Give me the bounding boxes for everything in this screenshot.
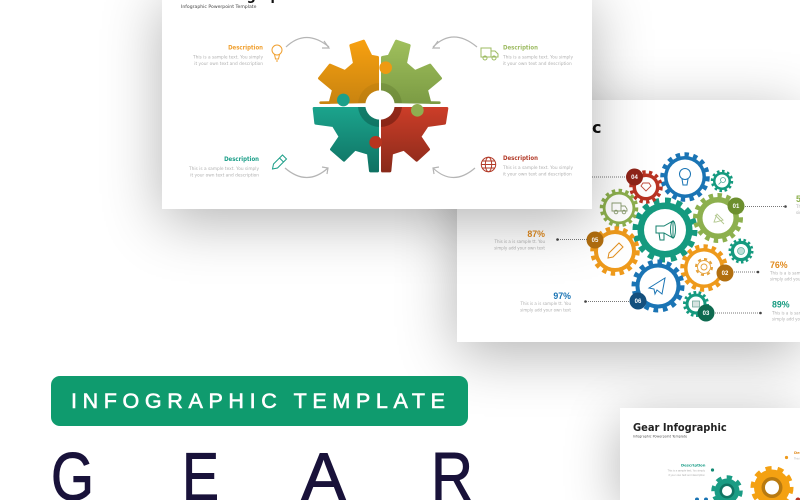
- description: red: it your own text and description: [503, 172, 572, 178]
- callout: 58%: [745, 194, 800, 215]
- description: teal: [188, 156, 259, 178]
- puzzle knobs: [337, 61, 424, 149]
- description: teal: This is a sample text. You simply: [668, 470, 706, 472]
- slide title: Gear Infographic: [633, 421, 727, 434]
- slide title fragment: c: [592, 118, 601, 137]
- badge 06: 06: [635, 299, 642, 305]
- icon: cog: [696, 259, 712, 275]
- gear: green 01: [696, 196, 744, 240]
- arrow: teal to gear: [285, 167, 328, 178]
- gear: blue fragment: [695, 498, 708, 500]
- description: green: Description: [503, 44, 538, 52]
- icon: diamond: [641, 183, 651, 191]
- description: orange: [794, 450, 800, 460]
- panel: bottom right gear slide: [620, 408, 800, 500]
- gear: blue top: [662, 154, 708, 200]
- icon: box: [692, 301, 700, 307]
- gear: teal centre: [636, 200, 694, 260]
- gear: orange: [752, 468, 792, 500]
- arrow: orange to gear: [286, 38, 329, 48]
- description: red: [502, 155, 573, 178]
- banner text: INFOGRAPHIC TEMPLATE: [71, 389, 445, 413]
- marker: teal dot: [711, 468, 714, 472]
- callout: 87%: [494, 229, 587, 250]
- white hub: [365, 90, 395, 120]
- badge 01: 01: [733, 204, 740, 210]
- callout: 97%: This is a is sample tt. You: [520, 301, 571, 306]
- description: teal: [668, 462, 706, 477]
- callout: 76%: [734, 260, 800, 282]
- arrow: red to gear: [433, 167, 475, 178]
- badge 05: 05: [592, 238, 599, 244]
- icon: truck: [481, 48, 498, 60]
- gear: green truck: [602, 190, 636, 226]
- callout: 97%: 97%: [553, 291, 571, 301]
- icon: megaphone: [656, 221, 676, 240]
- description: red: This is a sample text. You simply: [502, 165, 573, 171]
- icon: globe: [738, 248, 744, 254]
- marker: orange dot: [785, 456, 788, 459]
- gear: red fragment: [796, 498, 800, 500]
- description: green: [502, 44, 573, 67]
- description: teal: it your own text and description: [190, 172, 259, 178]
- badge 02: 02: [722, 271, 729, 277]
- badge 03: 03: [703, 311, 710, 317]
- arrow: green to gear: [433, 37, 477, 48]
- callout: 97%: [520, 291, 629, 312]
- gear: small teal right: [730, 240, 752, 262]
- description: orange: This is a sample text. You simply: [192, 54, 263, 60]
- description: orange: it your own text and description: [194, 61, 263, 67]
- description: green: it your own text and description: [503, 61, 572, 67]
- icon: paper plane: [649, 278, 665, 294]
- slide subtitle: Infographic Powerpoint Template: [181, 4, 257, 10]
- gear: orange 02: [682, 246, 734, 290]
- gear piece: red: [382, 108, 447, 171]
- gear: small teal top right: [712, 171, 732, 191]
- icon: bell: [714, 214, 724, 224]
- gear piece: green: [382, 41, 441, 103]
- description: orange: Description: [228, 44, 263, 52]
- banner: infographic template: [51, 376, 468, 426]
- icon: bulb: [272, 45, 282, 61]
- gear piece: teal: [314, 108, 378, 171]
- description: teal: This is a sample text. You simply: [188, 166, 259, 172]
- callout: 97%: simply add your own text: [520, 308, 571, 312]
- description: green: This is a sample text. You simply: [502, 54, 573, 60]
- icon: truck: [612, 203, 627, 214]
- callout: 87%: This is a is sample tt. You: [494, 239, 545, 244]
- description: teal: Description: [224, 156, 259, 163]
- icon: bulb: [680, 168, 690, 185]
- gear: orange 05: [586, 228, 638, 274]
- icon: magnifier: [718, 178, 726, 184]
- description: teal: Description: [681, 462, 706, 468]
- puzzle gear: [314, 41, 447, 171]
- gear: teal: [713, 477, 741, 500]
- leader line 04: [592, 176, 628, 178]
- icon: globe: [481, 157, 496, 172]
- badge 04: 04: [631, 175, 638, 181]
- callout: 87%: simply add your own text: [494, 246, 545, 250]
- slide subtitle: Infographic Powerpoint Template: [633, 434, 687, 438]
- callout: 76%: 76%: [770, 260, 788, 270]
- icon: pencil: [272, 155, 286, 169]
- icon: pencil: [608, 243, 623, 258]
- gear: small teal 03: [684, 292, 714, 322]
- gear: blue 06: [630, 262, 682, 310]
- description: orange: [192, 44, 263, 67]
- description: teal: it your own text and description: [668, 474, 706, 477]
- callout: 87%: 87%: [527, 229, 545, 239]
- description: red: Description: [503, 155, 538, 162]
- headline: GEAR: [51, 439, 473, 500]
- dark hub ring: [358, 83, 402, 127]
- panel: right radial gears slide: [457, 100, 800, 342]
- gear: red 04: [626, 168, 661, 202]
- panel: top puzzle gear slide: [162, 0, 592, 209]
- callout: 89%: 89%: [772, 300, 790, 310]
- callout: 89%: [715, 300, 800, 322]
- gear piece: orange: [319, 41, 378, 103]
